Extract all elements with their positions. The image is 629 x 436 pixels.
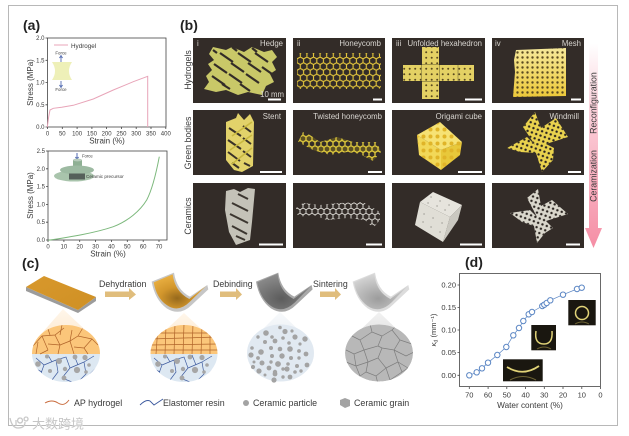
chart: ceramic precursor compression: Stress (MPa) [26, 172, 35, 219]
chart: hydrogel stress-strain: 350 [146, 132, 157, 138]
process label: dehydration: Dehydration [99, 279, 147, 289]
icon: sintered trough [353, 273, 409, 312]
chart: hydrogel stress-strain: 100 [72, 132, 83, 138]
circle: ceramic grains [345, 324, 414, 384]
chart: ceramic precursor compression: 10 [61, 244, 68, 250]
chart: hydrogel stress-strain: 1.5 [36, 58, 45, 64]
arrow: dehydration [105, 288, 136, 300]
chart: hydrogel stress-strain: 2.0 [36, 36, 45, 42]
photo: mesh: Mesh [562, 39, 581, 48]
chart: curvature vs water content: 40 [521, 390, 530, 400]
photo: unfolded hexahedron: iii [396, 39, 401, 48]
arrow: reconfiguration to ceramization [585, 43, 602, 248]
inset: U bend [531, 325, 556, 350]
photo: mesh: iv [495, 39, 501, 48]
chart: hydrogel stress-strain: 250 [116, 132, 127, 138]
legend: elastomer resin: Elastomer resin [163, 398, 225, 408]
photo: hedge: i [197, 39, 199, 48]
row label: ceramics: Ceramics [183, 197, 193, 235]
chart: hydrogel stress-strain: 0 [46, 132, 50, 138]
chart: hydrogel stress-strain: 50 [59, 132, 66, 138]
photo: honeycomb: ii [297, 39, 301, 48]
chart: curvature vs water content: Water content (%) [497, 401, 563, 410]
photo: honeycomb [293, 38, 385, 103]
arrow: reconfiguration to ceramization: Reconfiguration [588, 72, 598, 134]
chart: curvature vs water content: 0.15 [441, 303, 456, 312]
photo: honeycomb: Honeycomb [339, 39, 382, 48]
data series [467, 285, 584, 378]
photo: hedge: 10 mm [260, 90, 284, 99]
chart: ceramic precursor compression: 1.5 [37, 185, 46, 191]
photo: hedge [193, 38, 286, 103]
chart: ceramic precursor compression: 20 [76, 244, 84, 250]
chart legend [54, 43, 96, 50]
icon: debound trough [256, 273, 313, 312]
chart: ceramic precursor compression: 2.0 [37, 167, 46, 173]
circle: dehydrated microstructure [150, 325, 218, 382]
chart: curvature vs water content: d [434, 340, 440, 343]
legend: AP hydrogel: AP hydrogel [74, 398, 122, 408]
chart: curvature vs water content: 60 [484, 390, 492, 400]
legend: ceramic particle: Ceramic particle [253, 398, 317, 408]
chart: curvature vs water content: 20 [559, 390, 567, 400]
chart: hydrogel stress-strain: 400 [161, 132, 171, 138]
photo: ceramic windmill [492, 183, 584, 248]
chart: ceramic precursor compression: 2.5 [37, 149, 46, 155]
inset: compression press: Force [82, 154, 93, 158]
icon: dehydrated trough [152, 273, 208, 312]
photo: twisted honeycomb: Twisted honeycomb [313, 112, 383, 121]
inset: tensile sample: Force [55, 87, 67, 92]
chart: ceramic precursor compression: 40 [108, 244, 115, 250]
chart: ceramic precursor compression: 0.0 [37, 238, 46, 244]
chart: hydrogel stress-strain: Strain (%) [89, 136, 125, 146]
chart: curvature vs water content: 50 [503, 390, 511, 400]
chart: hydrogel stress-strain: 0.0 [36, 125, 45, 131]
icon: hydrogel slab [26, 276, 96, 313]
panel: c label: (c) [22, 255, 39, 271]
process label: sintering: Sintering [313, 279, 348, 289]
chart: hydrogel stress-strain: 200 [102, 132, 112, 138]
arrow: reconfiguration to ceramization: Ceramization [588, 150, 598, 202]
chart: ceramic precursor compression: 1.0 [37, 202, 46, 208]
photo: windmill: Windmill [550, 112, 579, 121]
chart: ceramic precursor compression: 0 [46, 244, 50, 250]
row label: hydrogels: Hydrogels [183, 50, 193, 90]
chart: hydrogel stress-strain: 0.5 [36, 103, 45, 109]
row label: green bodies: Green bodies [183, 116, 193, 169]
photo: origami cube: Origami cube [436, 112, 482, 121]
chart: curvature vs water content: 0.10 [441, 326, 456, 334]
chart: curvature vs water content: 10 [578, 390, 586, 400]
process label: debinding: Debinding [213, 279, 253, 289]
photo: unfolded hexahedron: Unfolded hexahedron [407, 39, 482, 48]
inset: tensile sample [52, 50, 72, 92]
photo: unfolded hexahedron [392, 38, 485, 103]
chart legend: Hydrogel [71, 43, 96, 50]
photo: stent [193, 110, 286, 175]
photo: hedge: Hedge [260, 39, 283, 48]
chart: curvature vs water content: κ [429, 341, 438, 346]
chart: curvature vs water content [429, 274, 603, 410]
photo: windmill [492, 110, 584, 175]
photo: ceramic honeycomb [293, 183, 385, 248]
legend: ceramic grain: Ceramic grain [354, 398, 409, 408]
legend: AP hydrogel [45, 398, 122, 408]
chart: hydrogel stress-strain [26, 36, 171, 146]
chart: curvature vs water content: (mm⁻¹) [429, 313, 438, 340]
chart: curvature vs water content: 70 [465, 390, 473, 400]
chart: hydrogel stress-strain: 1.0 [36, 80, 45, 86]
inset: compression press: Ceramic precursor [86, 174, 124, 179]
hydrogel curve [47, 76, 148, 127]
chart: curvature vs water content: 0 [598, 390, 603, 400]
circle: hydrogel and elastomer microstructure [32, 325, 100, 382]
chart: curvature vs water content: 0.00 [441, 371, 456, 380]
chart: ceramic precursor compression: 30 [92, 244, 100, 250]
chart: ceramic precursor compression: Strain (%) [90, 250, 126, 258]
chart: ceramic precursor compression: 0.5 [37, 220, 46, 226]
panel: b label: (b) [180, 17, 198, 33]
legend: microstructure key [45, 398, 409, 408]
inset: compression press [54, 153, 124, 182]
inset: tensile sample: Force [55, 50, 67, 56]
chart: ceramic precursor compression: 60 [140, 244, 147, 250]
chart: curvature vs water content: 0.20 [441, 280, 456, 290]
chart: ceramic precursor compression [26, 149, 167, 258]
photo: twisted honeycomb [293, 110, 385, 175]
chart: hydrogel stress-strain: 300 [131, 132, 142, 138]
photo: ceramic stent [193, 183, 286, 248]
photo: origami cube [392, 110, 485, 175]
chart: hydrogel stress-strain: Stress (MPa) [26, 59, 35, 106]
inset: shallow bend [503, 359, 543, 381]
panel: a label: (a) [23, 17, 40, 33]
cones to magnified circles [36, 309, 96, 340]
chart: hydrogel stress-strain: 150 [87, 132, 98, 138]
inset: ring bend [568, 300, 596, 325]
watermark: 大数跨境 [32, 416, 84, 432]
chart: ceramic precursor compression: 50 [124, 244, 131, 250]
circle: ceramic particles [247, 324, 314, 383]
chart: curvature vs water content: 30 [540, 390, 548, 400]
chart: curvature vs water content: 0.05 [441, 348, 456, 357]
panel: d label: (d) [465, 254, 483, 270]
compression curve [48, 157, 159, 240]
chart: ceramic precursor compression: 70 [156, 244, 163, 250]
photo: stent: Stent [263, 112, 282, 121]
arrow: debinding [220, 288, 242, 300]
arrow: sintering [320, 288, 341, 300]
photo: mesh [492, 38, 584, 103]
photo: ceramic cube [392, 183, 485, 248]
